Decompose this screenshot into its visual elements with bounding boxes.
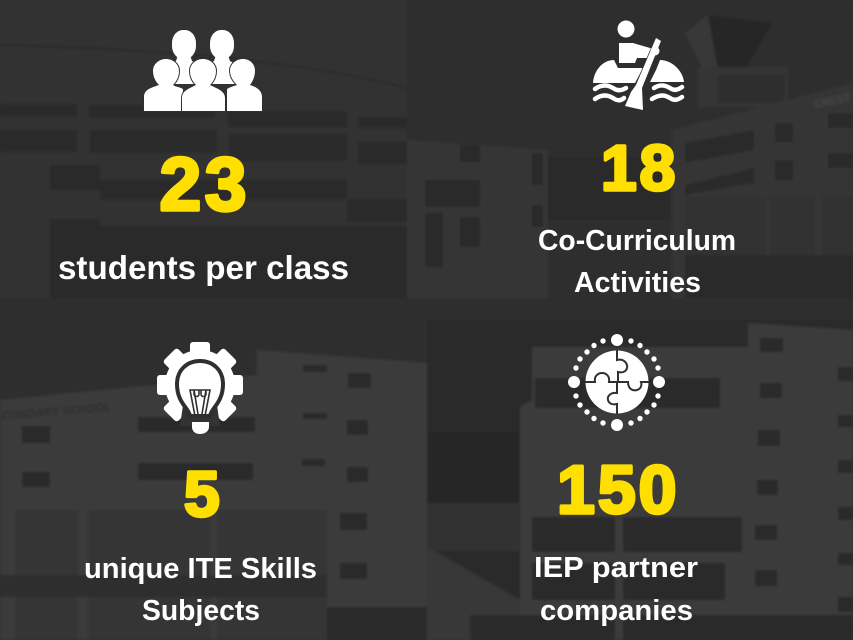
icon: person rowing with paddle [593,20,684,110]
bottom-left photo: school block [0,320,430,640]
label: IEP partner companies [534,552,698,627]
label: students per class: students per class [58,249,349,286]
top-left photo: curved building [0,0,407,298]
panel: students per class [58,30,349,286]
bottom-left photo: school block: CONDARY SCHOOL [1,401,112,423]
label: unique ITE Skills Subjects: unique ITE Skills [84,553,317,585]
number: 150: 150 [557,452,679,528]
number: 18: 18 [601,132,678,204]
label: Co-Curriculum Activities: Co-Curriculum [538,225,736,257]
label: IEP partner companies: companies [540,595,693,627]
label: unique ITE Skills Subjects [84,553,317,627]
panel: IEP partner companies [534,334,698,627]
icon: gear with light bulb [157,342,243,434]
top-right photo: tower and main block: CREST [813,91,852,111]
panel: unique ITE skills subjects [84,342,317,627]
label: Co-Curriculum Activities [538,225,736,299]
label: Co-Curriculum Activities: Activities [574,267,701,299]
icon: puzzle globe with dotted ring [568,334,665,431]
number: 23: 23 [160,142,250,226]
label: unique ITE Skills Subjects: Subjects [142,595,260,627]
icon: group of people [144,30,262,111]
number: 5: 5 [184,458,220,530]
top-right photo: tower and main block [407,0,853,298]
label: IEP partner companies: IEP partner [534,552,698,584]
panel: co-curriculum activities [538,20,736,299]
bottom-right photo: trees and tall block [427,320,853,640]
